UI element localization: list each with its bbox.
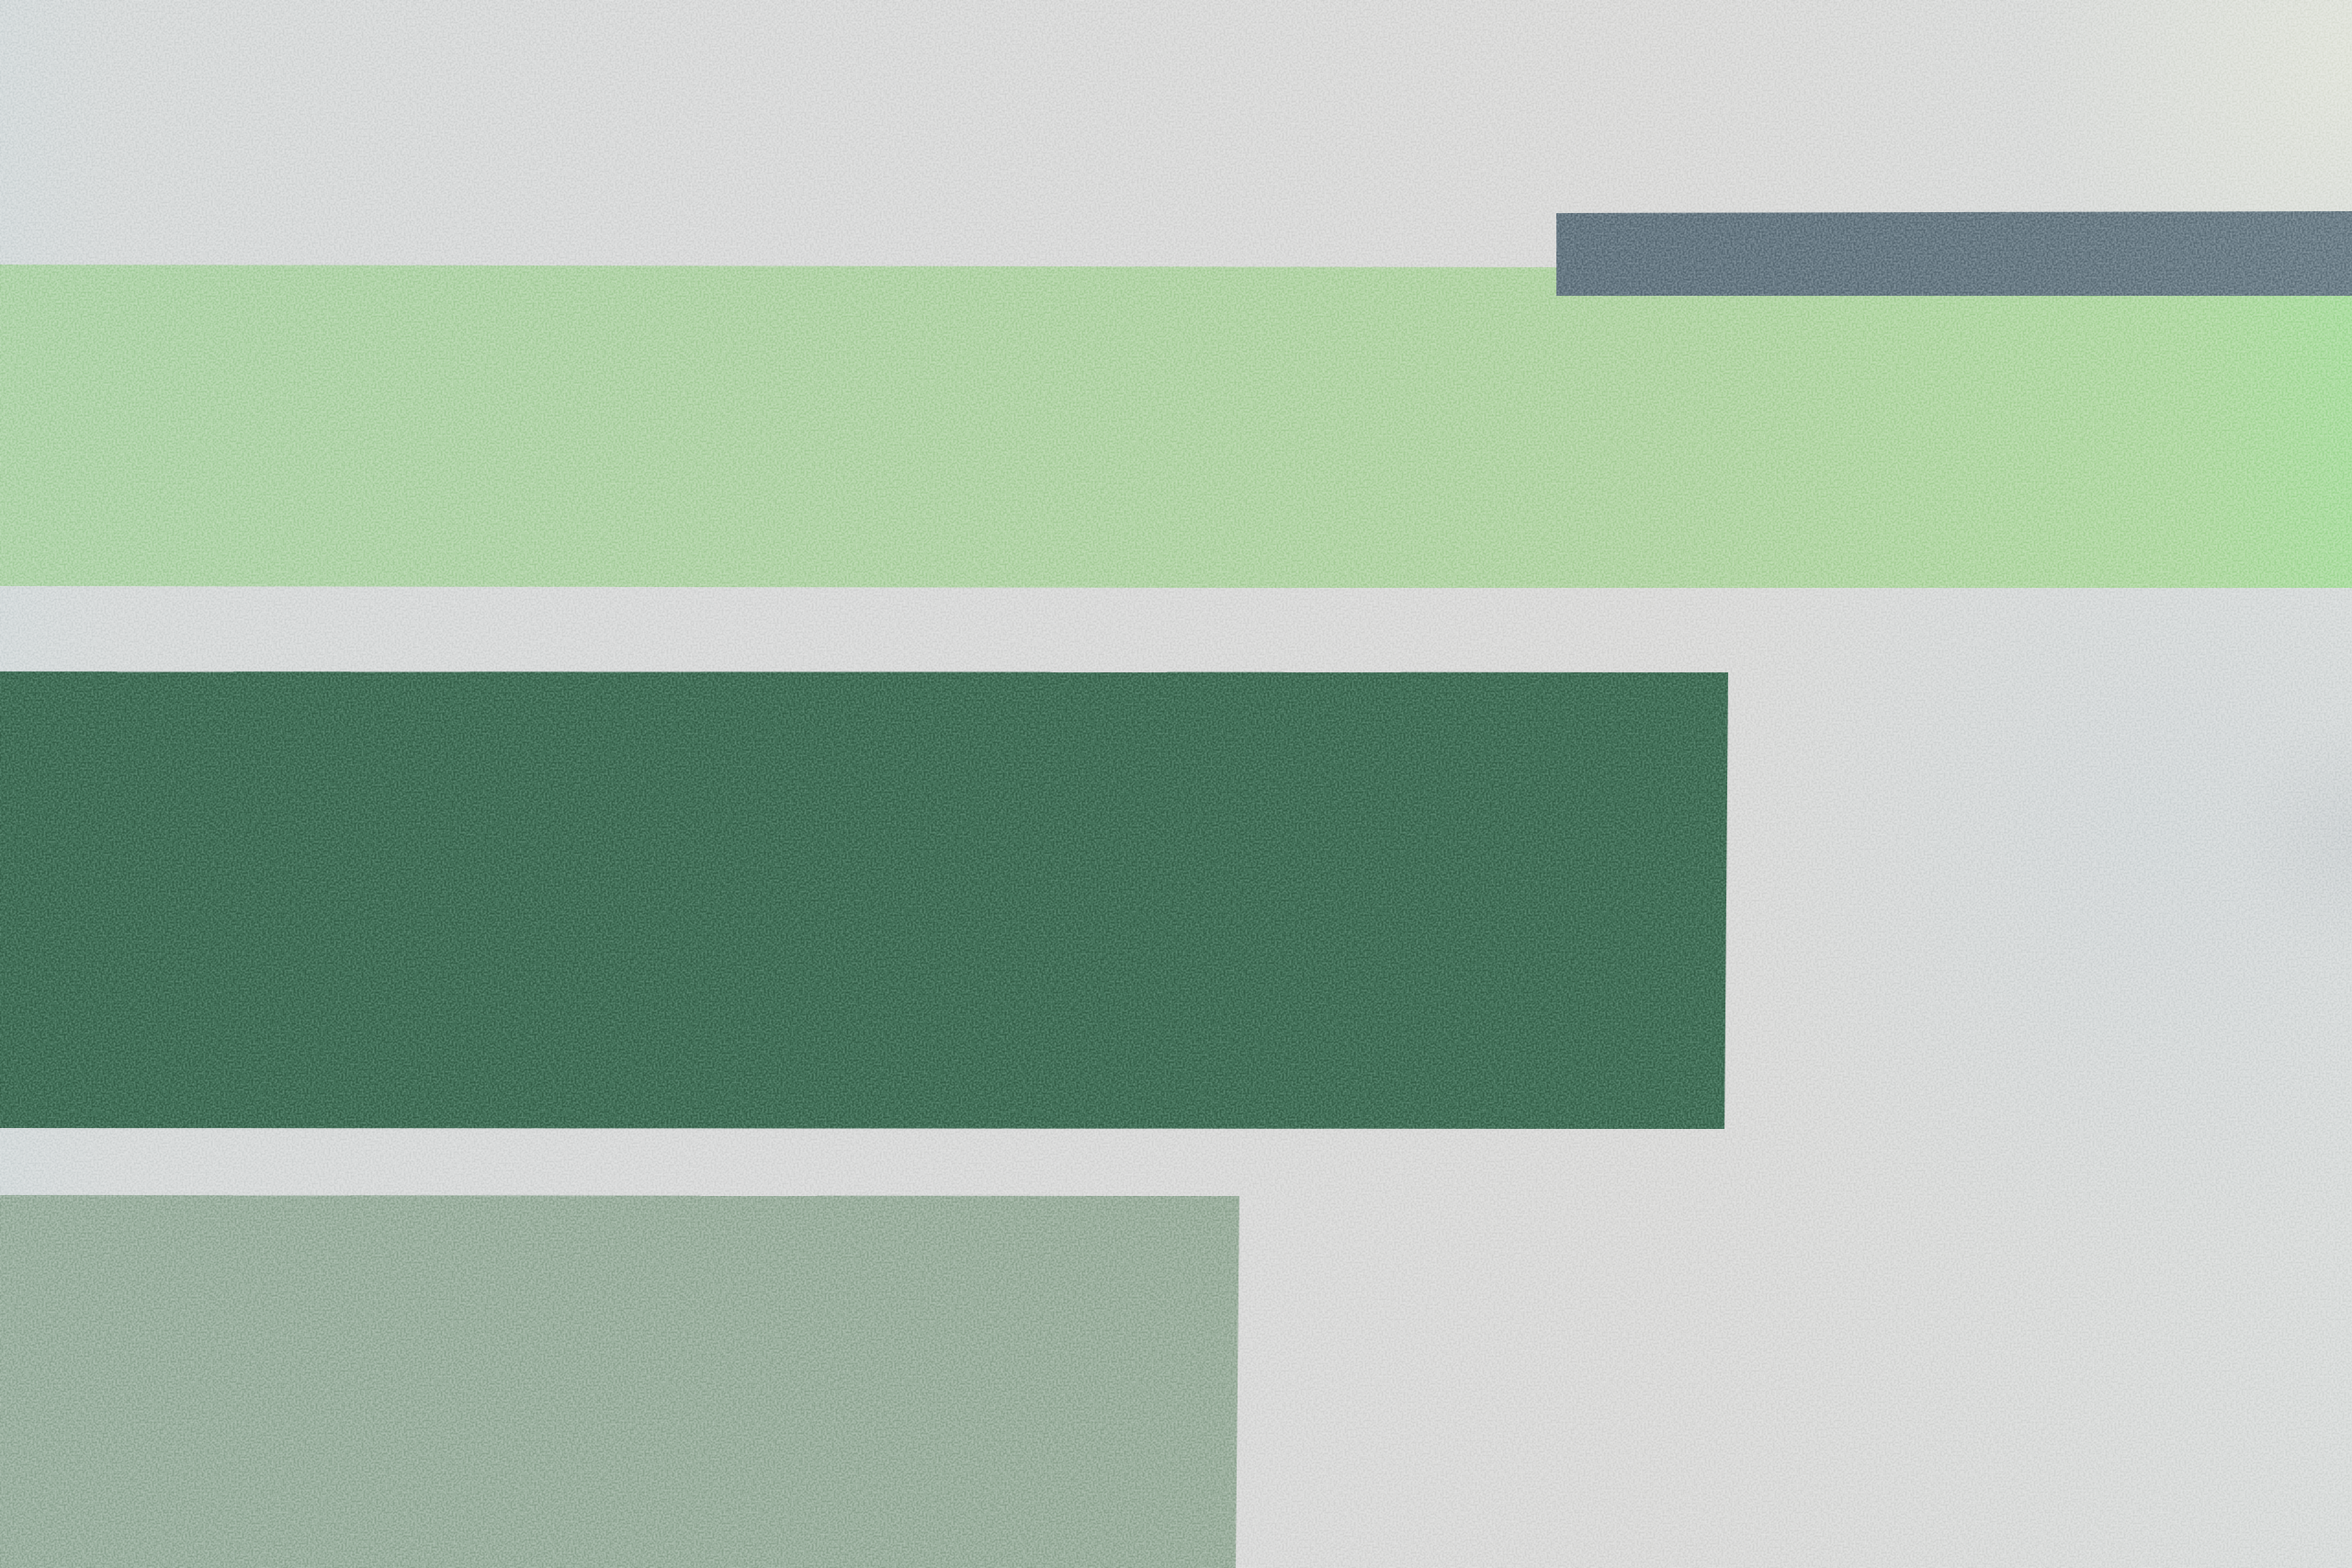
light green bar <box>0 265 2352 588</box>
sage bar <box>0 1195 1239 1568</box>
dark green bar <box>0 671 1728 1129</box>
slate bar <box>1556 211 2352 296</box>
